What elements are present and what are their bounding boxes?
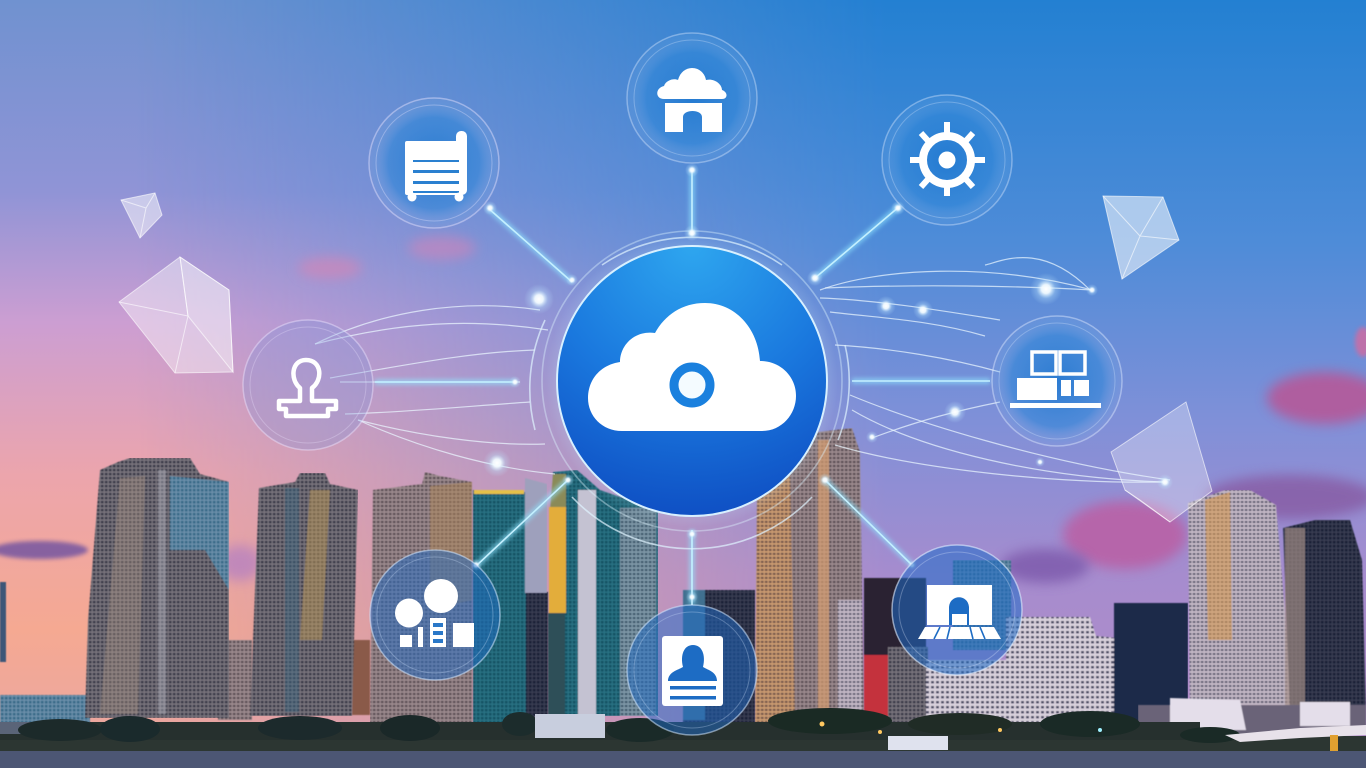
skyline: far buildings	[0, 560, 1188, 735]
satellite: upper left cart	[369, 98, 499, 228]
satellite: right devices	[992, 316, 1122, 446]
icon: id card	[662, 636, 723, 706]
spokes connecting satellites	[375, 170, 990, 605]
icon: computer and screens	[1010, 352, 1101, 408]
skyline: tower three	[370, 472, 547, 725]
satellite: upper right gear	[882, 95, 1012, 225]
crystal polyhedrons	[119, 193, 1212, 522]
waterfront trees and lights	[0, 708, 1366, 752]
icon: storage cart	[405, 131, 467, 202]
satellite: bottom id card	[627, 605, 757, 735]
skyline: tower five	[755, 428, 864, 728]
icon: cloud centre ring	[674, 367, 710, 403]
crystal: upper right	[1103, 196, 1179, 279]
crystal: lower right	[1111, 402, 1212, 522]
crystal: left large	[119, 257, 233, 373]
satellite: lower right laptop	[892, 545, 1022, 675]
skyline: tower four	[548, 470, 658, 716]
satellite: lower left charts	[370, 550, 500, 680]
skyline: tower two	[250, 473, 358, 716]
orbital rings around hub	[530, 231, 849, 549]
icon: gear	[910, 122, 985, 196]
icon: laptop	[918, 585, 1001, 639]
network lines	[315, 258, 1170, 482]
sunset clouds	[0, 236, 1366, 583]
satellite: top home cloud	[627, 33, 757, 163]
icon: cloud	[588, 303, 796, 431]
skyline: tower one	[85, 458, 229, 718]
icon: bubbles and bars	[395, 579, 474, 647]
glowing nodes	[470, 163, 1173, 603]
skyline: right towers	[1138, 490, 1366, 735]
satellite: left stamp	[243, 320, 373, 450]
central cloud hub	[546, 235, 838, 527]
crystal: upper left small	[121, 193, 162, 238]
water	[0, 751, 1366, 768]
icon: stamp outline	[279, 360, 336, 416]
icon: house with cloud roof	[657, 68, 726, 132]
